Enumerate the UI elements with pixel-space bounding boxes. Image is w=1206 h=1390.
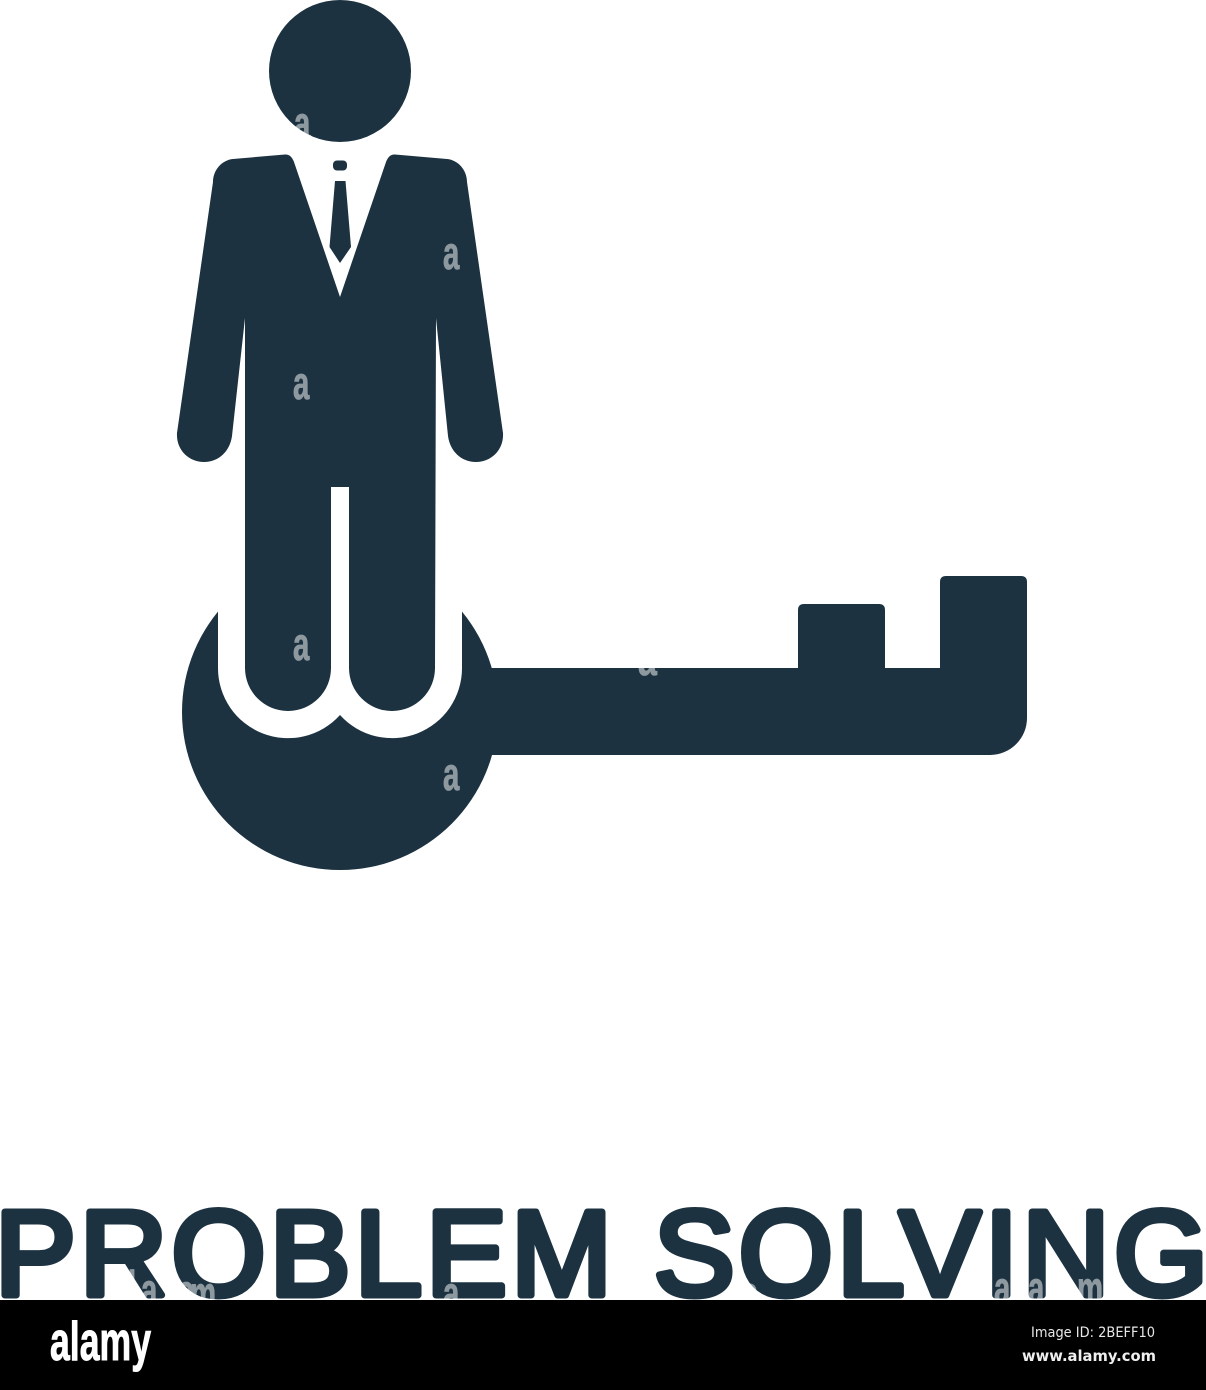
watermark letters: a [293, 359, 310, 410]
icon: key [182, 554, 1027, 870]
watermark letters: a [294, 99, 311, 150]
watermark letters: a [443, 750, 460, 801]
watermark letters: a [638, 633, 657, 685]
watermark letters: a [443, 1269, 460, 1320]
icon: businessman [177, 0, 503, 711]
watermark letters: l [128, 1263, 136, 1314]
watermark letters: a [178, 1267, 195, 1318]
watermark letters: a [443, 229, 460, 280]
image id: Image ID: 2BEFF10 [1031, 1325, 1155, 1341]
title: PROBLEM SOLVING [0, 1185, 1206, 1321]
watermark letters: a [742, 1269, 759, 1320]
footer bar [0, 1300, 1206, 1390]
watermark letters: a [994, 1264, 1011, 1315]
watermark letters [128, 99, 1103, 1320]
watermark letters: m [1077, 1264, 1103, 1315]
watermark letters: a [293, 620, 310, 671]
white outline around legs [218, 540, 462, 738]
icon: businessman standing on key [177, 0, 1027, 870]
watermark letters: m [190, 1269, 216, 1320]
website url: www.alamy.com [1022, 1347, 1156, 1365]
alamy logo: alamy [50, 1310, 151, 1372]
watermark letters: a [1028, 1264, 1045, 1315]
watermark letters: a [141, 1266, 158, 1317]
